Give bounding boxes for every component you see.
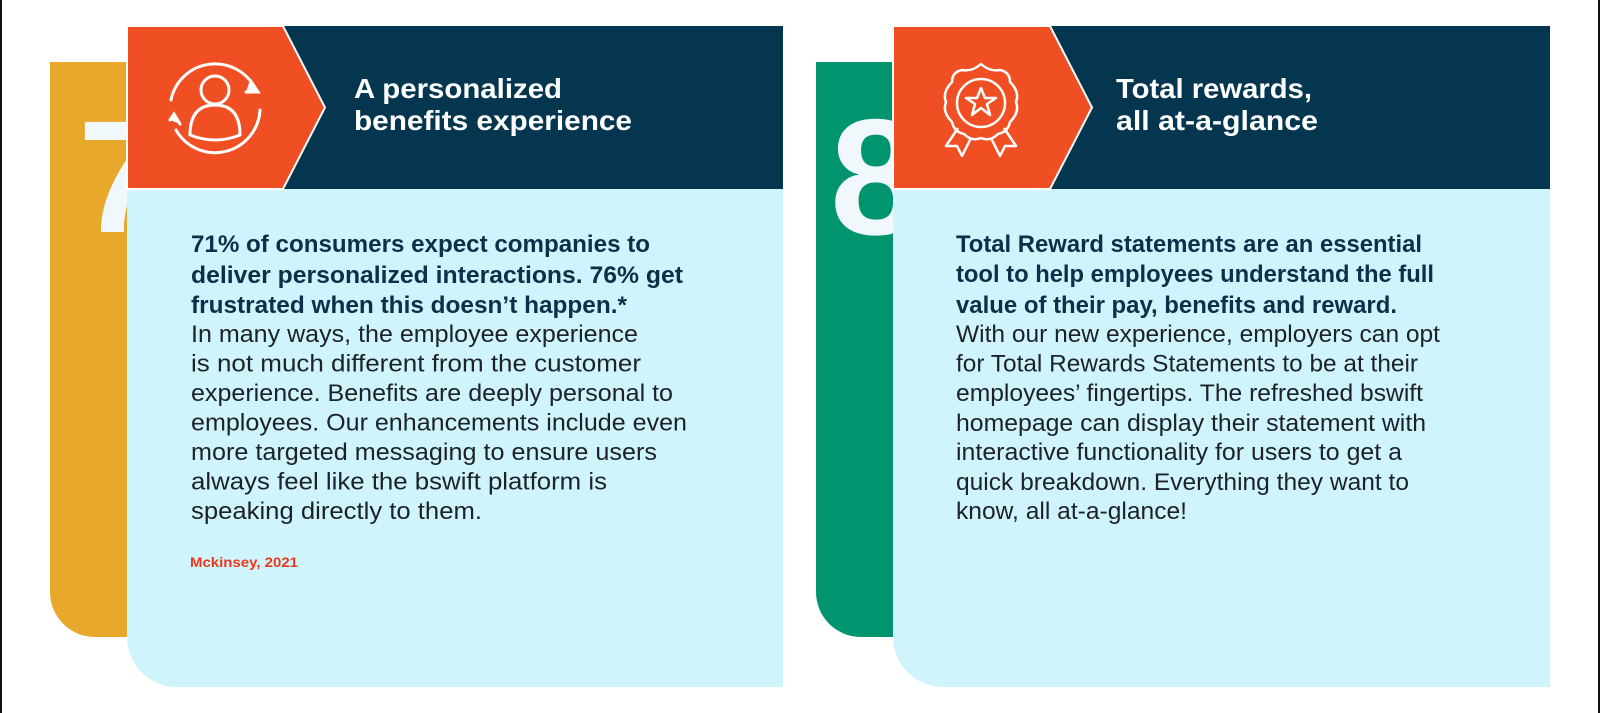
text block: bold stat: frustrated when this doesn’t happen.* xyxy=(191,292,627,319)
icon: award medal xyxy=(945,64,1017,156)
heading: benefits experience xyxy=(354,105,632,136)
panel: card 8 total rewards xyxy=(893,26,1550,687)
text block: body: more targeted messaging to ensure users xyxy=(191,439,657,466)
number 7: 7 xyxy=(78,87,167,266)
text block: body: With our new experience, employers can opt xyxy=(956,321,1440,348)
header chevron xyxy=(893,26,1092,189)
text block: body: is not much different from the customer xyxy=(191,350,641,378)
text block: bold stat: deliver personalized interactions. 76% get xyxy=(191,262,683,289)
text block: body: always feel like the bswift platform is xyxy=(191,468,607,496)
heading: all at-a-glance xyxy=(1116,105,1318,136)
icon: person with cycle arrows xyxy=(170,64,260,153)
text block: body: know, all at-a-glance! xyxy=(956,498,1187,525)
text block: body: experience. Benefits are deeply personal to xyxy=(191,380,673,407)
source note: Mckinsey, 2021 xyxy=(190,554,298,570)
text block: body: speaking directly to them. xyxy=(191,498,482,525)
text block: bold stat: 71% of consumers expect companies to xyxy=(191,231,650,258)
text block: body: employees. Our enhancements include even xyxy=(191,410,687,436)
panel: green number tab 8 xyxy=(816,62,922,637)
panel: yellow number tab 7 xyxy=(50,62,167,637)
header chevron xyxy=(127,26,325,189)
text block: body: quick breakdown. Everything they want to xyxy=(956,469,1409,496)
text block: bold intro: Total Reward statements are an essential xyxy=(956,231,1422,258)
number 8: 8 xyxy=(830,85,922,269)
panel: card 7 personalized benefits xyxy=(127,26,783,687)
text block: body: In many ways, the employee experience xyxy=(191,321,638,348)
heading: Total rewards, xyxy=(1116,73,1312,104)
heading: A personalized xyxy=(354,73,562,104)
text block: bold intro: tool to help employees understand the full xyxy=(956,261,1434,288)
text block: body: homepage can display their statement with xyxy=(956,410,1426,437)
text block: body: interactive functionality for users to get a xyxy=(956,439,1402,466)
text block: body: employees’ fingertips. The refreshed bswift xyxy=(956,380,1423,407)
text block: body: for Total Rewards Statements to be at their xyxy=(956,350,1418,378)
text block: bold intro: value of their pay, benefits and reward. xyxy=(956,292,1397,319)
